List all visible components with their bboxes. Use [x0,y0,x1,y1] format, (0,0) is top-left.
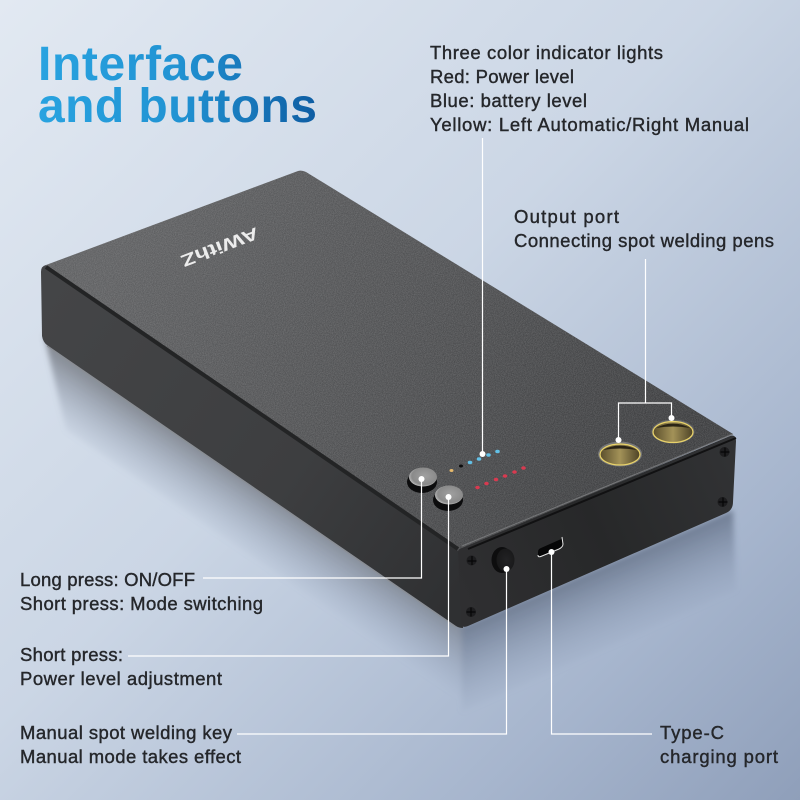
label: power level: Power level adjustment [20,668,222,689]
label: on/off: Long press: ON/OFF [20,569,195,590]
label: indicator lights: Three color indicator lights [430,42,663,63]
title: Interface [38,38,243,91]
label: indicator lights [430,42,749,135]
label: power level [20,644,222,689]
top face grain [46,171,733,551]
label: output port: Output port [514,206,619,227]
label: on/off [20,569,263,614]
label: on/off: Short press: Mode switching [20,593,263,614]
output port right [652,420,694,444]
screws [466,447,730,617]
leader lines [128,138,672,734]
logo: AWithZ: AWithZ [178,223,261,270]
label: type-c [660,722,778,767]
label: type-c: Type-C [660,722,724,743]
icon: buttons [407,468,463,511]
label: indicator lights: Red: Power level [430,66,574,87]
label: indicator lights: Yellow: Left Automatic/Right Manual [430,114,749,135]
top face [46,171,733,551]
device reflection [44,335,736,712]
label: type-c: charging port [660,746,778,767]
title line two: and buttons [38,80,317,133]
indicator lights: red row [475,466,526,489]
front face [458,436,736,627]
label: manual key [20,722,241,767]
label: power level: Short press: [20,644,123,665]
indicator lights: blue row [450,450,500,472]
left side face [41,265,463,628]
manual key [492,547,514,573]
label: manual key: Manual mode takes effect [20,746,241,767]
label: manual key: Manual spot welding key [20,722,233,743]
leader dots [418,415,674,572]
label: output port: Connecting spot welding pens [514,230,774,251]
output port left [598,442,642,466]
device: spot welder [41,171,736,628]
type-c port [538,537,563,557]
label: output port [514,206,774,251]
label: indicator lights: Blue: battery level [430,90,587,111]
